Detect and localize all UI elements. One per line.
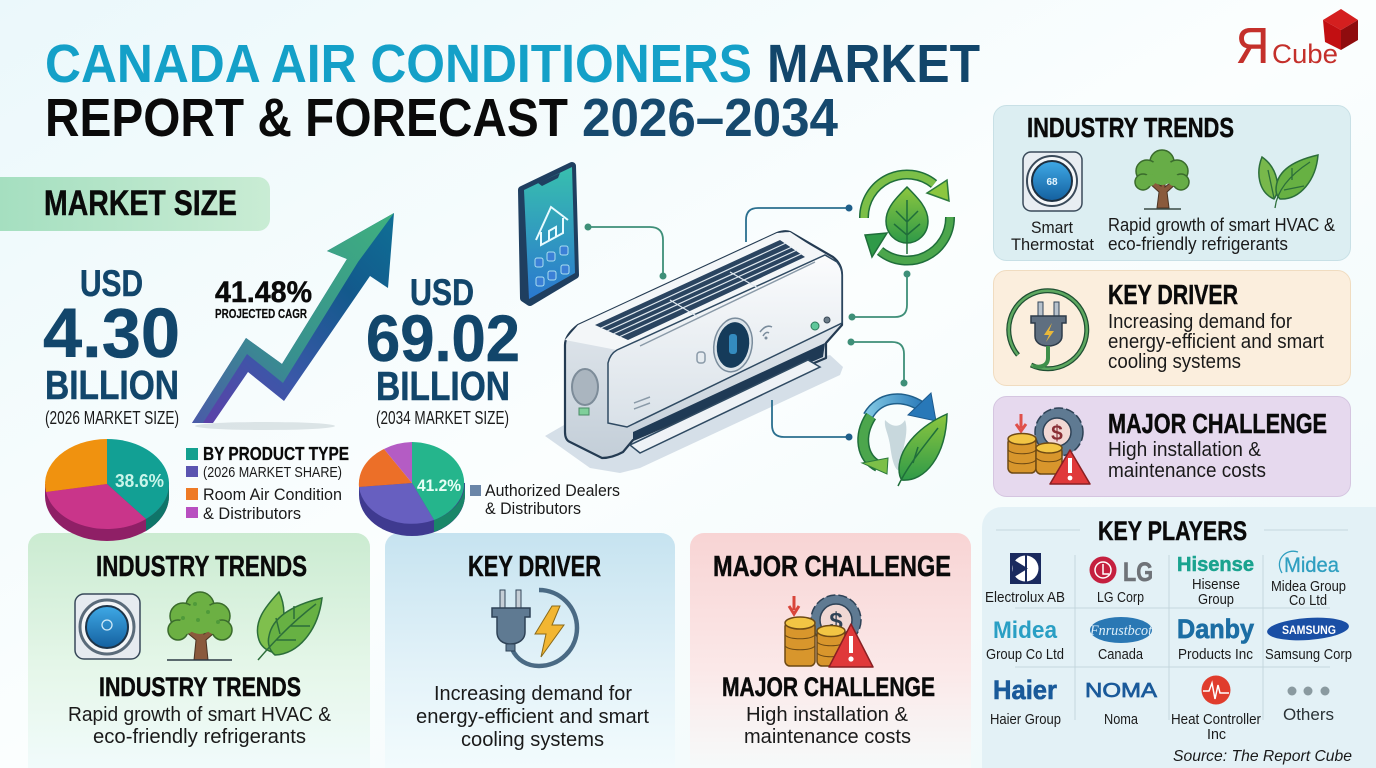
- legend: by product type: & Distributors: [203, 504, 301, 523]
- others: Others: [1283, 705, 1334, 724]
- icon: smart thermostat: [75, 594, 140, 659]
- text: rapid growth: [1108, 215, 1335, 254]
- player: Midea Group Co Ltd: Midea: [993, 617, 1058, 644]
- text: major challenge body: High installation &: [746, 704, 909, 726]
- player: Heat Controller: Heat Controller: [1171, 711, 1261, 728]
- player: Midea Group: Midea: [1284, 554, 1339, 577]
- panel: industry trends (bottom): [28, 533, 370, 768]
- panel: industry trends (right): [994, 106, 1350, 260]
- player: Noma: NOMA: [1085, 680, 1158, 702]
- heading: major challenge: MAJOR CHALLENGE: [713, 551, 951, 583]
- 2034 market size value: 69.02: [366, 301, 520, 375]
- player: Electrolux: Electrolux AB: [985, 589, 1065, 606]
- text: industry trends body: [68, 704, 332, 748]
- text: high installation: High installation &: [1108, 439, 1262, 461]
- title: 2026–2034: [582, 88, 838, 148]
- title: REPORT & FORECAST: [45, 88, 568, 148]
- label: smart thermostat: [1011, 218, 1094, 254]
- player: LG: [1090, 556, 1153, 606]
- player: Danby: Products Inc: [1178, 646, 1253, 663]
- heading: industry trends: INDUSTRY TRENDS: [96, 551, 307, 583]
- text: industry trends body: Rapid growth of smart HVAC &: [68, 704, 332, 726]
- legend: authorized dealers: Authorized Dealers: [485, 481, 620, 500]
- icon: smart thermostat 68: 68: [1046, 177, 1058, 188]
- icon: air conditioner unit: [545, 231, 843, 473]
- panel: key players: [982, 507, 1376, 768]
- text: increasing demand: Increasing demand for: [1108, 311, 1292, 333]
- 2026 market size value: BILLION: [45, 362, 179, 408]
- subheading: industry trends: INDUSTRY TRENDS: [99, 672, 301, 702]
- panel: key driver (right): [994, 270, 1350, 386]
- player: Midea Group: Co Ltd: [1289, 592, 1327, 609]
- heading: market size: MARKET SIZE: [44, 184, 237, 223]
- icon: green leaves: [1259, 155, 1318, 208]
- player: Samsung: [1265, 615, 1352, 663]
- icon: smartphone: [522, 166, 575, 302]
- icon: tree: [167, 592, 232, 660]
- player: Hisense: Hisense: [1192, 576, 1240, 593]
- player: Midea Group: Midea Group: [1271, 578, 1346, 595]
- legend: authorized dealers: [470, 481, 620, 518]
- text: high installation: [1108, 439, 1266, 482]
- icon: plug in green circle: [1009, 291, 1087, 369]
- icon: coins, gear and warning: [785, 595, 873, 667]
- player: Midea Group Co Ltd: Group Co Ltd: [986, 646, 1064, 663]
- logo: RCube: [1236, 9, 1358, 74]
- text: industry trends body: eco-friendly refrigerants: [93, 726, 306, 748]
- panel: major challenge (right): [994, 396, 1350, 496]
- icon: recycling leaf: [864, 174, 950, 261]
- player: Danby: [1177, 614, 1254, 663]
- logo: RCube: Cube: [1272, 39, 1338, 69]
- player: Danby: Danby: [1177, 614, 1254, 644]
- source note: Source: The Report Cube: [1173, 748, 1352, 765]
- icon: coins, gear and warning: $: [829, 608, 843, 635]
- pie value label: 38.6%: [115, 471, 164, 491]
- player: Hisense: Group: [1198, 591, 1234, 608]
- others: [1283, 686, 1334, 724]
- player: Midea Group: [1271, 551, 1346, 609]
- text: key driver body: energy-efficient and smart: [416, 706, 649, 728]
- 2034 market size value: [366, 272, 520, 428]
- heading: market size: [0, 177, 270, 231]
- label: smart thermostat: Thermostat: [1011, 235, 1094, 254]
- heading: key driver: KEY DRIVER: [468, 551, 601, 583]
- heading: key players: KEY PLAYERS: [1098, 516, 1247, 546]
- title: CANADA AIR CONDITIONERS: [45, 34, 752, 94]
- player: Electrolux: [985, 553, 1065, 606]
- 2026 market size value: (2026 MARKET SIZE): [45, 408, 179, 428]
- 2026 market size value: USD: [80, 263, 143, 304]
- icon: coins, gear and warning: [1008, 408, 1090, 484]
- text: rapid growth: eco-friendly refrigerants: [1108, 234, 1288, 254]
- icon: plug with bolt: [492, 590, 577, 666]
- logo: RCube: Я: [1236, 18, 1269, 74]
- player: LG: LG Corp: [1097, 589, 1144, 606]
- panel: major challenge (bottom): [690, 533, 971, 768]
- icon: eco refrigerant cycle: [862, 393, 947, 486]
- growth arrow: [192, 213, 394, 430]
- player: Samsung: Samsung Corp: [1265, 646, 1352, 663]
- subheading: major challenge: MAJOR CHALLENGE: [722, 672, 935, 702]
- text: rapid growth: Rapid growth of smart HVAC &: [1108, 215, 1335, 235]
- connector lines: [584, 204, 910, 440]
- player: Haier: [990, 675, 1061, 728]
- 2034 market size value: USD: [410, 272, 474, 313]
- label: smart thermostat: Smart: [1031, 218, 1073, 237]
- pie value label: 41.2%: [417, 476, 461, 495]
- text: major challenge body: [744, 704, 911, 748]
- pie chart: by product type: [45, 439, 169, 541]
- player: LG: LG: [1123, 557, 1153, 587]
- player: Noma: Noma: [1104, 711, 1139, 728]
- player: Haier: Haier: [993, 675, 1057, 705]
- CAGR label: PROJECTED CAGR: [215, 306, 307, 321]
- icon: smart thermostat 68: [1023, 152, 1082, 211]
- heading: INDUSTRY TRENDS: [1027, 112, 1234, 143]
- panel: key driver (bottom): [385, 533, 675, 768]
- legend: authorized dealers: & Distributors: [485, 499, 581, 518]
- player: Canada: Fnrustbcot: [1089, 623, 1153, 639]
- CAGR label: 41.48%: [215, 276, 312, 309]
- text: key driver body: [416, 683, 649, 751]
- player: Heat Controller: [1171, 676, 1261, 743]
- heading: KEY DRIVER: [1108, 279, 1238, 310]
- text: key driver body: cooling systems: [461, 729, 604, 751]
- icon: coins, gear and warning: $: [1051, 422, 1063, 445]
- 2034 market size value: (2034 MARKET SIZE): [376, 408, 509, 428]
- player: Samsung: SAMSUNG: [1282, 623, 1336, 637]
- player: Hisense: [1177, 554, 1254, 608]
- text: major challenge body: maintenance costs: [744, 726, 911, 748]
- legend: by product type: BY PRODUCT TYPE: [203, 444, 349, 464]
- player: Canada: Canada: [1098, 646, 1144, 663]
- text: key driver body: Increasing demand for: [434, 683, 632, 705]
- player: Hisense: Hisense: [1177, 554, 1254, 576]
- 2026 market size value: 4.30: [43, 294, 180, 372]
- title: [45, 34, 980, 148]
- player: Canada: [1089, 617, 1153, 663]
- legend: by product type: (2026 MARKET SHARE): [203, 464, 342, 481]
- text: increasing demand: cooling systems: [1108, 351, 1241, 373]
- icon: tree: [1135, 150, 1189, 209]
- player: Midea Group Co Ltd: [986, 617, 1064, 663]
- 2034 market size value: BILLION: [376, 363, 510, 409]
- icon: green leaves: [257, 592, 322, 660]
- legend: by product type: Room Air Condition: [203, 485, 342, 504]
- player: Haier: Haier Group: [990, 711, 1061, 728]
- text: increasing demand: energy-efficient and smart: [1108, 331, 1324, 353]
- legend: by product type: [186, 444, 349, 523]
- pie chart: distribution channel: [359, 442, 465, 536]
- text: increasing demand: [1108, 311, 1324, 373]
- title: MARKET: [767, 34, 980, 94]
- text: high installation: maintenance costs: [1108, 460, 1266, 482]
- 2026 market size value: [43, 263, 180, 428]
- player: Heat Controller: Inc: [1207, 726, 1226, 743]
- player: Noma: [1085, 680, 1158, 728]
